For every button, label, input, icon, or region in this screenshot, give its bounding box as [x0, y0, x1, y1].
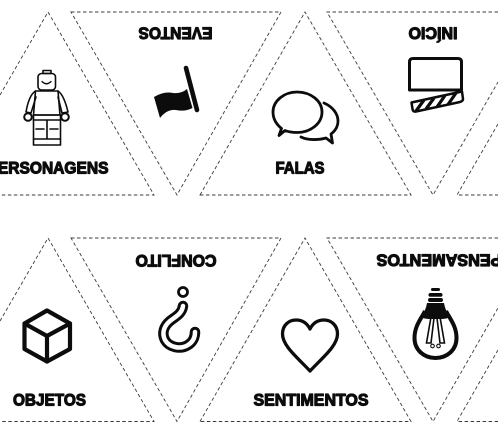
pennant outline: falas [200, 12, 411, 195]
icon: cube [24, 310, 70, 362]
icon: clapperboard [410, 58, 463, 112]
label: objetos: OBJETOS [13, 392, 86, 410]
pennant outline: conflito [71, 238, 281, 422]
pennant outline: next pennant edge [457, 124, 498, 195]
icon: speech bubbles [273, 92, 338, 143]
pennant outline: sentimentos [200, 238, 411, 422]
pennant outline: eventos [71, 12, 281, 195]
label: falas: FALAS [276, 160, 324, 178]
label: pensamentos (upside down): PENSAMENTOS [376, 250, 498, 268]
icon: light bulb [414, 288, 456, 358]
panel: bottom row pennants [0, 238, 498, 422]
icon: heart [282, 320, 338, 371]
label: sentimentos: SENTIMENTOS [254, 392, 368, 410]
pennant outline: objetos [0, 238, 154, 422]
label: eventos (upside down): EVENTOS [138, 24, 212, 42]
label: conflito (upside down): CONFLITO [135, 251, 216, 269]
icon: lego figure [24, 70, 69, 145]
pennant outline: next pennant edge [457, 350, 498, 422]
pennant outline: pensamentos [327, 238, 498, 422]
label: inicio (upside down): INÍCIO [408, 24, 458, 42]
icon: flag [154, 68, 197, 118]
icon: hook [163, 288, 195, 347]
pennant outline: inicio [327, 12, 498, 195]
pennant outline: personagens [0, 12, 154, 195]
panel: top row pennants [0, 12, 498, 195]
